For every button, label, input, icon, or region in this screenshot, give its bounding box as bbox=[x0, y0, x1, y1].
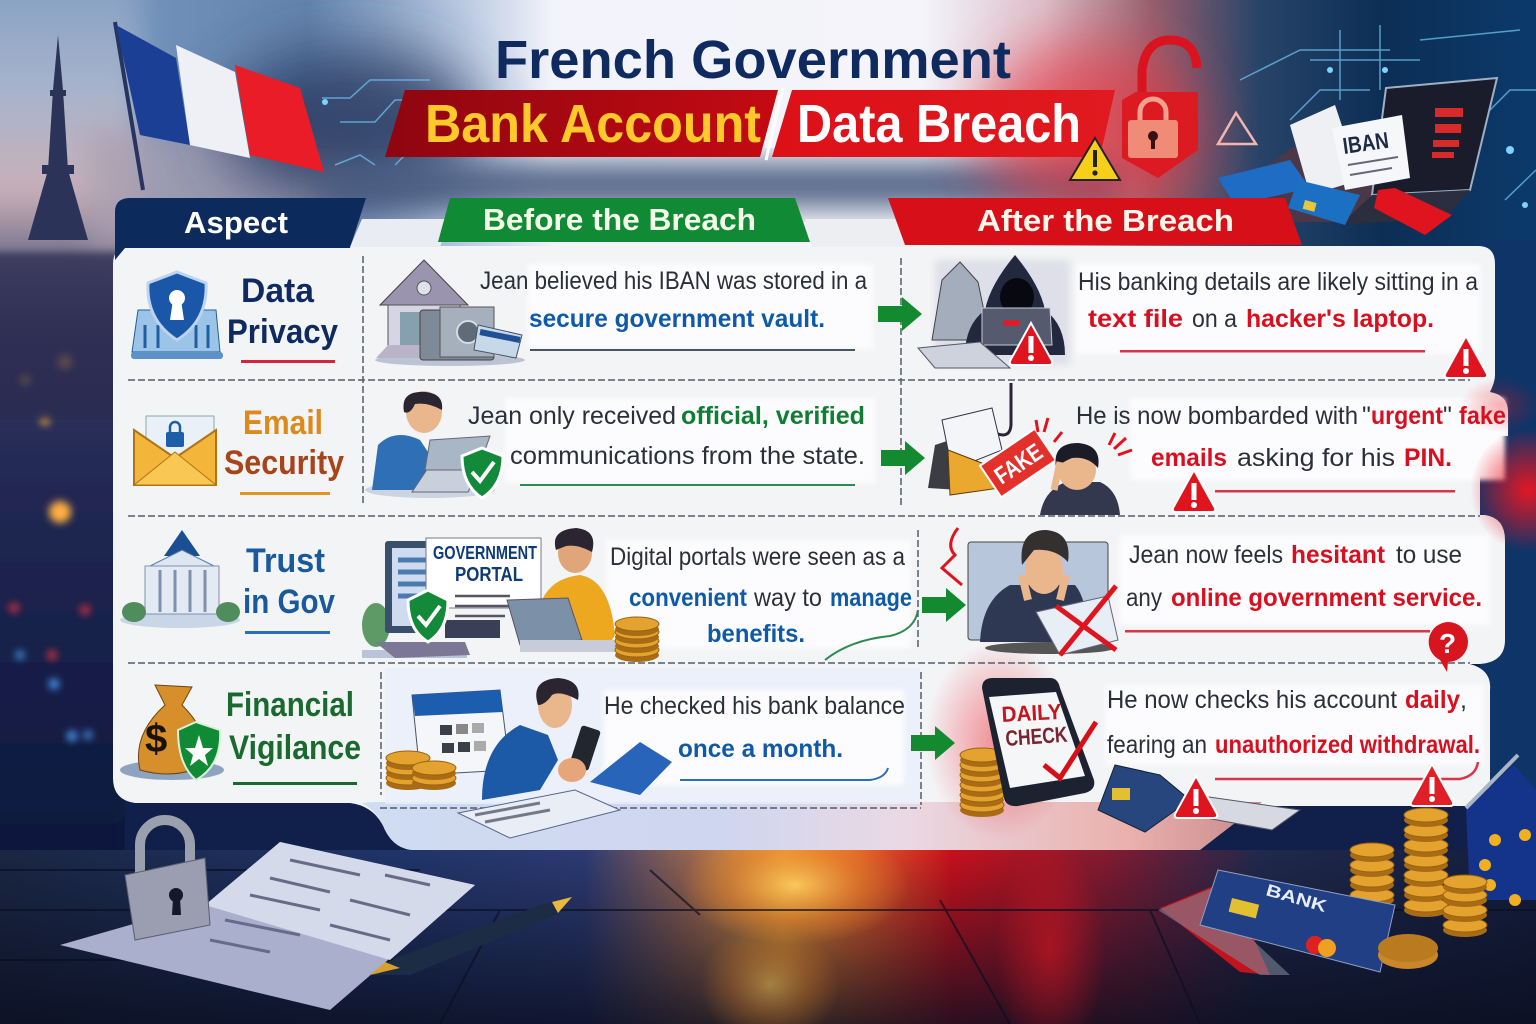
text: before, row 4: once a month. bbox=[678, 735, 843, 763]
icon: Eiffel tower bbox=[0, 35, 120, 420]
text: after, row 3: Jean now feels bbox=[1129, 541, 1283, 569]
text: before, row 1: secure government vault. bbox=[529, 305, 825, 333]
illustration: document and pen bbox=[60, 842, 572, 1010]
aspect: Financial Vigilance: Financial bbox=[226, 686, 354, 724]
icon: warning row 4 bbox=[1411, 764, 1453, 806]
illustration: government portal: PORTAL bbox=[455, 564, 523, 586]
header: After the Breach: After the Breach bbox=[977, 203, 1234, 238]
icon: yellow warning sign bbox=[1070, 138, 1120, 180]
text: before, row 2: communications from the state. bbox=[510, 442, 865, 470]
text: after, row 3: online government service. bbox=[1171, 584, 1482, 612]
aspect: Financial Vigilance: Vigilance bbox=[229, 729, 361, 767]
icon: money bag with shield bbox=[120, 685, 224, 780]
aspect: Data Privacy: Data bbox=[241, 272, 315, 310]
text: before, row 2: official, verified bbox=[681, 402, 865, 430]
arrow: row 4 bbox=[911, 726, 955, 760]
illustration: phishing email and stressed man bbox=[928, 383, 1132, 515]
title banner: Bank Account bbox=[425, 94, 761, 154]
arrow: row 1 bbox=[878, 297, 922, 331]
illustration: man with laptop and check shield bbox=[365, 391, 503, 498]
illustration: bank card, coin stacks, EU flag bbox=[1158, 755, 1536, 975]
arrow: row 3 bbox=[922, 588, 966, 622]
title: French Government: French Government bbox=[495, 30, 1011, 90]
aspect: Email Security: Email bbox=[243, 404, 323, 442]
header: After the Breach bbox=[888, 198, 1302, 245]
text: after, row 3 bbox=[1125, 541, 1482, 632]
illustration: government portal: GOVERNMENT bbox=[433, 543, 537, 563]
text: after, row 2: " bbox=[1362, 402, 1371, 430]
text: before, row 3: manage bbox=[830, 584, 912, 612]
text: after, row 4: , bbox=[1460, 686, 1467, 714]
text: after, row 2: He is now bombarded with bbox=[1076, 402, 1358, 430]
text: after, row 1: hacker's laptop. bbox=[1246, 305, 1434, 333]
icon: money bag with shield: $ bbox=[145, 717, 167, 761]
text: after, row 1: His banking details are likely sitting in a bbox=[1078, 268, 1478, 296]
aspect: Email Security bbox=[134, 404, 344, 495]
text: before, row 4: He checked his bank balance bbox=[604, 692, 905, 720]
text: before, row 3 bbox=[610, 543, 918, 660]
title banner bbox=[385, 88, 1115, 160]
text: after, row 4: fearing an bbox=[1107, 731, 1207, 759]
text: after, row 2: " bbox=[1443, 402, 1452, 430]
icon: envelope with lock bbox=[134, 416, 216, 485]
icon: warning row 2 bbox=[1173, 470, 1215, 512]
text: after, row 2: PIN. bbox=[1404, 444, 1452, 472]
text: before, row 3: benefits. bbox=[707, 620, 805, 648]
text: after, row 4: daily bbox=[1405, 686, 1460, 714]
text: after, row 4: He now checks his account bbox=[1107, 686, 1397, 714]
icon: shield on building bbox=[131, 272, 223, 359]
illustration: laptop, IBAN file and cards bbox=[1218, 78, 1497, 235]
illustration: daily check phone, coins, card bbox=[960, 678, 1300, 832]
title banner: Data Breach bbox=[797, 94, 1081, 154]
text: after, row 2: emails bbox=[1151, 444, 1227, 472]
icon: question pin: ? bbox=[1439, 628, 1456, 659]
icon: question pin bbox=[1429, 622, 1468, 672]
text: after, row 1 bbox=[1078, 268, 1478, 352]
icon: pale warning sign bbox=[1218, 113, 1256, 144]
header tab: blank gap 2 bbox=[805, 219, 908, 247]
icon: French flag bbox=[115, 22, 324, 190]
illustration: silver padlock bbox=[125, 820, 210, 940]
text: before, row 4 bbox=[604, 692, 905, 780]
illustration: phishing email and stressed man: FAKE bbox=[990, 439, 1048, 490]
text: before, row 3: way to bbox=[753, 584, 822, 612]
icon: warning row 1 bbox=[1445, 336, 1487, 378]
aspect: Data Privacy: Privacy bbox=[227, 313, 338, 351]
illustration: hacker at laptop bbox=[918, 255, 1070, 368]
text: before, row 2: Jean only received bbox=[468, 402, 676, 430]
text: after, row 3: to use bbox=[1396, 541, 1462, 569]
text: after, row 1: text file bbox=[1088, 305, 1183, 333]
illustration: bank and safe bbox=[375, 260, 525, 366]
arrow: row 2 bbox=[881, 441, 925, 475]
text: after, row 2 bbox=[1076, 402, 1506, 492]
header: Before the Breach: Before the Breach bbox=[483, 202, 756, 237]
text: before, row 1 bbox=[480, 267, 867, 351]
header tab: blank gap bbox=[350, 219, 450, 247]
panel: comparison table card bbox=[113, 246, 1536, 850]
aspect: Data Privacy bbox=[131, 272, 338, 363]
text: after, row 3: any bbox=[1126, 584, 1162, 612]
icon: open red padlock bbox=[1122, 40, 1198, 178]
text: before, row 1: Jean believed his IBAN was stored in a bbox=[480, 267, 867, 295]
aspect: Trust in Gov: in Gov bbox=[243, 583, 335, 621]
illustration: laptop, IBAN file and cards: IBAN bbox=[1341, 127, 1390, 159]
text: before, row 2 bbox=[468, 402, 865, 486]
text: after, row 3: hesitant bbox=[1291, 541, 1386, 569]
illustration: worried man and crossed form bbox=[942, 528, 1118, 655]
aspect: Trust in Gov bbox=[120, 530, 335, 634]
text: before, row 3: convenient bbox=[629, 584, 748, 612]
aspect: Trust in Gov: Trust bbox=[246, 542, 325, 580]
illustration: bank card, coin stacks, EU flag: BANK bbox=[1264, 881, 1330, 916]
text: after, row 2: fake bbox=[1459, 402, 1506, 430]
aspect: Financial Vigilance bbox=[120, 685, 361, 785]
text: after, row 2: urgent bbox=[1371, 402, 1444, 430]
text: after, row 4 bbox=[1107, 686, 1480, 779]
illustration: daily check phone, coins, card: DAILY bbox=[1001, 699, 1062, 727]
text: before, row 3: Digital portals were seen as a bbox=[610, 543, 905, 571]
header: Before the Breach bbox=[438, 198, 810, 242]
icon: government building bbox=[120, 530, 240, 628]
illustration: daily check phone, coins, card: CHECK bbox=[1005, 722, 1068, 751]
aspect: Email Security: Security bbox=[224, 444, 344, 482]
illustration: calendar, coins and man with phone bbox=[386, 678, 672, 838]
text: after, row 4: unauthorized withdrawal. bbox=[1215, 731, 1480, 759]
text: after, row 1: on a bbox=[1192, 305, 1237, 333]
text: after, row 2: asking for his bbox=[1237, 444, 1395, 472]
illustration: government portal bbox=[362, 528, 659, 662]
header: Aspect bbox=[115, 198, 366, 260]
header: Aspect: Aspect bbox=[184, 205, 288, 240]
